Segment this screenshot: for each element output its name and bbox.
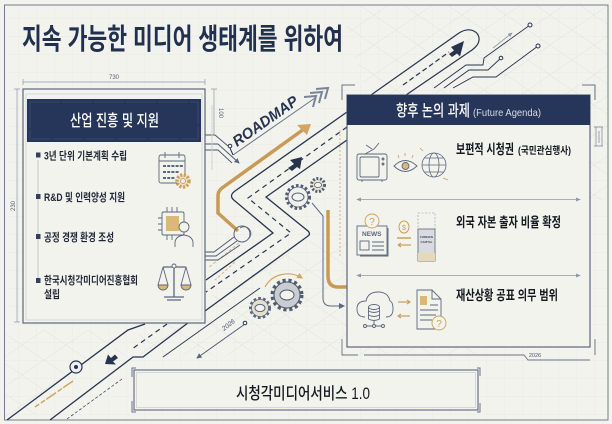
icon: document question bbox=[417, 290, 446, 330]
2026 right label: 2026 bbox=[529, 353, 541, 359]
item: association: 설립 bbox=[44, 288, 60, 301]
panel header: 산업 진흥 및 지원 bbox=[70, 112, 159, 130]
item: R&D bbox=[36, 190, 125, 204]
icon: calendar gear bbox=[159, 152, 189, 187]
dimension: 100 bbox=[211, 89, 223, 135]
gold rotation arrow bbox=[265, 274, 302, 287]
icon: chip and person bbox=[158, 207, 193, 247]
icon: television bbox=[357, 143, 387, 182]
road node circles bbox=[499, 23, 540, 60]
icon: foreign capital bar bbox=[418, 213, 435, 261]
icon: newspaper: NEWS bbox=[362, 231, 382, 238]
lower right flow arrow bbox=[312, 203, 344, 306]
item: financial disclosure: 재산상황 공표 의무 범위 bbox=[456, 288, 558, 303]
upper small gear bbox=[312, 178, 324, 192]
dimension: 730: 730 bbox=[109, 75, 120, 81]
item: universal access bbox=[456, 142, 571, 157]
icon: newspaper bbox=[357, 214, 388, 256]
right side small mark bbox=[594, 127, 603, 146]
panel header: 향후 논의 과제 bbox=[396, 102, 470, 120]
panel: industry promotion bbox=[23, 89, 205, 323]
dimension: 100: 100 bbox=[217, 108, 223, 119]
icon: foreign capital bar: CAPITAL bbox=[421, 240, 433, 244]
icon: eye bbox=[394, 153, 417, 172]
2026 road arrow bbox=[197, 318, 247, 358]
panel: service title: 시청각미디어서비스 1.0 bbox=[236, 384, 370, 403]
road marker icon bbox=[70, 361, 82, 373]
gold dashes bbox=[35, 381, 73, 407]
icon: newspaper: ? bbox=[369, 217, 375, 228]
roadmap label: ROADMAP bbox=[230, 92, 302, 150]
dimension: 230 bbox=[11, 89, 20, 322]
divider arrow bbox=[357, 274, 580, 276]
thin side arrows bbox=[493, 33, 512, 48]
item: competition: 공정 경쟁 환경 조성 bbox=[44, 230, 114, 244]
icon: dollar exchange bbox=[397, 221, 411, 247]
large gear bbox=[273, 281, 301, 309]
panel header bbox=[347, 95, 590, 125]
dimension: 230: 230 bbox=[11, 200, 17, 211]
icon: scales bbox=[158, 264, 191, 300]
item: competition bbox=[36, 230, 114, 244]
roadmap label bbox=[228, 88, 328, 155]
panel header: (Future Agenda) bbox=[473, 107, 541, 119]
item: universal access: 보편적 시청권 bbox=[456, 142, 514, 157]
icon: cloud database bbox=[357, 292, 393, 328]
panel: future agenda bbox=[342, 85, 595, 360]
item: plan: 3년 단위 기본계획 수립 bbox=[44, 148, 127, 162]
panel: service title bbox=[132, 368, 480, 412]
item: universal access: (국민관심행사) bbox=[518, 144, 571, 157]
icon: exchange arrows bbox=[398, 300, 410, 318]
item: association: 한국시청각미디어진흥협회 bbox=[44, 273, 138, 287]
icon: document question: ? bbox=[436, 319, 442, 330]
swirl arrow bbox=[234, 226, 251, 242]
gears bbox=[251, 178, 324, 317]
small gear bbox=[251, 299, 269, 317]
item: R&D: R&D 및 인력양성 지원 bbox=[44, 190, 125, 204]
panel header bbox=[27, 99, 201, 142]
title: 지속 가능한 미디어 생태계를 위하여 bbox=[22, 23, 343, 56]
item: plan bbox=[36, 148, 127, 162]
icon: foreign capital bar: FOREIGN bbox=[420, 235, 433, 239]
item: foreign capital: 외국 자본 출자 비율 확정 bbox=[456, 214, 561, 230]
icon: dollar exchange: $ bbox=[402, 225, 406, 232]
circuit lines bbox=[205, 105, 240, 260]
divider arrow bbox=[357, 198, 580, 200]
dimension: 730 bbox=[23, 75, 205, 85]
item: association bbox=[36, 273, 138, 301]
upper gear bbox=[287, 186, 309, 208]
gold roadmap arrow bbox=[208, 124, 347, 287]
road direction arrows bbox=[105, 41, 464, 364]
2026 road arrow: 2026 bbox=[220, 318, 237, 333]
icon: globe bbox=[420, 148, 448, 180]
